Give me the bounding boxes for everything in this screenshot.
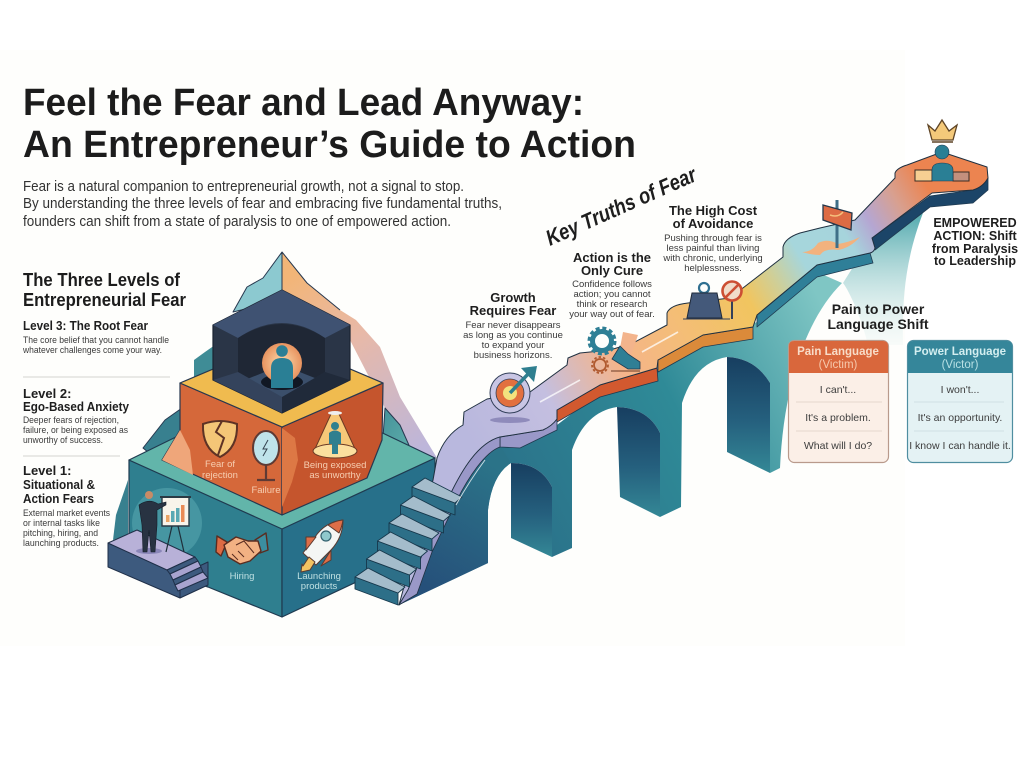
level 2 icon labels: Failure [251, 485, 281, 496]
truth: growth requires fear: Growth [490, 290, 536, 305]
icon: leader on podium with crown [915, 120, 969, 181]
level 2 text: unworthy of success. [23, 435, 103, 446]
truth: growth requires fear: Requires Fear [470, 303, 556, 318]
icon: person in spotlight [313, 411, 357, 458]
intro paragraph: By understanding the three levels of fear and embracing five fundamental truths, [23, 195, 502, 212]
level 1 text: Action Fears [23, 491, 94, 506]
pyramid level 3: dark root fear box [213, 290, 350, 413]
road side faces [500, 178, 988, 448]
icon: handshake [216, 533, 268, 564]
icon: no-entry sign [722, 282, 742, 319]
heading: pain to power [827, 301, 929, 332]
truth: high cost of avoidance [662, 203, 763, 274]
truth: action is the only cure: Only Cure [581, 263, 643, 278]
panel: power language: Power Language [914, 346, 1006, 358]
level 2 text: Ego-Based Anxiety [23, 399, 130, 414]
panel: power language: (Victor) [942, 359, 979, 371]
level 2 text: Deeper fears of rejection, [23, 415, 119, 426]
panel: power language: I know I can handle it. [909, 440, 1011, 452]
icon: cracked mirror [253, 431, 279, 480]
level 1 text: Situational & [23, 477, 95, 492]
empowered action label: to Leadership [934, 254, 1016, 268]
level 1 text: or internal tasks like [23, 518, 100, 529]
level 1 text: pitching, hiring, and [23, 528, 98, 539]
truth: high cost of avoidance: The High Cost [669, 203, 758, 218]
title: An Entrepreneur’s Guide to Action [23, 124, 636, 166]
icon: target with arrow [490, 366, 537, 423]
truth: growth requires fear: business horizons. [474, 350, 552, 361]
level 2 text: Level 2: [23, 386, 71, 401]
truth: growth requires fear: to expand your [482, 340, 544, 351]
side strip of curved ramp [399, 437, 500, 605]
level 1 text [23, 463, 110, 549]
level 1 icon labels: Launching [297, 571, 341, 582]
level 2 text: failure, or being exposed as [23, 425, 128, 436]
level 3 text [22, 318, 169, 356]
road surface: ascending path [399, 152, 988, 605]
intro paragraph [23, 178, 502, 230]
level 1 text: External market events [23, 508, 110, 519]
level 1 text: Level 1: [23, 463, 71, 478]
icon: signpost with path [802, 200, 860, 255]
presenter stage with stairs [108, 530, 208, 598]
panel: pain language: What will I do? [804, 440, 872, 452]
level 2 icon labels: as unworthy [309, 470, 361, 481]
heading: pain to power: Pain to Power [832, 301, 925, 317]
icon: cracked shield [203, 421, 237, 457]
truth: action is the only cure: Action is the [573, 250, 651, 265]
truth: action is the only cure: Confidence follows [572, 279, 652, 290]
intro paragraph: founders can shift from a state of paralysis to one of empowered action. [23, 213, 451, 230]
empowered action label [932, 216, 1018, 268]
truth: high cost of avoidance: Pushing through fear is [664, 233, 762, 244]
empowered action label: EMPOWERED [933, 216, 1017, 230]
icon: heavy weight [683, 283, 730, 319]
truth: growth requires fear: as long as you continue [463, 330, 563, 341]
icon: rocket [301, 520, 343, 572]
level 1 icon labels: products [301, 581, 337, 592]
panel: pain language [788, 340, 888, 462]
staircase to bridge [355, 478, 462, 605]
panel: power language [908, 340, 1012, 462]
heading: three levels: The Three Levels of [23, 270, 181, 290]
panel: power language: I won't... [941, 384, 979, 396]
pyramid level 2: orange block [162, 340, 383, 515]
level 3 text: whatever challenges come your way. [22, 345, 162, 356]
level 2 icon labels: rejection [202, 470, 238, 481]
bridge arches [399, 272, 842, 605]
level 1 icon labels: Hiring [230, 571, 254, 582]
truth: high cost of avoidance: less painful than living [667, 243, 759, 254]
empowered action label: ACTION: Shift [933, 229, 1017, 243]
level 3 text: Level 3: The Root Fear [23, 318, 148, 333]
fading arch behind upper bridge [843, 213, 923, 345]
halo behind presenter [132, 488, 202, 558]
road direction arrows [456, 332, 678, 505]
icon: presenter and chart board [136, 491, 191, 554]
level 3 text: The core belief that you cannot handle [23, 335, 169, 346]
heading: three levels [23, 270, 186, 310]
empowered action label: from Paralysis [932, 242, 1018, 256]
truth: high cost of avoidance: with chronic, underlying [662, 253, 763, 264]
pyramid level 1: teal base block [129, 385, 435, 617]
intro paragraph: Fear is a natural companion to entrepreneurial growth, not a signal to stop. [23, 178, 464, 195]
truth: growth requires fear [463, 290, 563, 361]
heading: three levels: Entrepreneurial Fear [23, 290, 186, 310]
truth: action is the only cure: action; you cannot [573, 289, 651, 300]
truth: action is the only cure [569, 250, 655, 320]
truth: high cost of avoidance: of Avoidance [673, 216, 753, 231]
title [23, 82, 636, 166]
truth: action is the only cure: think or research [577, 299, 647, 310]
level 2 icon labels: Being exposed [304, 460, 366, 471]
truth: high cost of avoidance: helplessness. [684, 263, 742, 274]
panel: pain language: (Victim) [819, 359, 858, 371]
truth: growth requires fear: Fear never disappears [465, 320, 561, 331]
level 2 icon labels: Fear of [205, 459, 235, 470]
icon: gears and stepping shoe [589, 328, 640, 373]
panel: pain language: I can't... [820, 384, 856, 396]
level 2 text [23, 386, 130, 446]
title: Feel the Fear and Lead Anyway: [23, 82, 584, 124]
mountain behind pyramid [113, 252, 437, 540]
heading: key truths of fear: Key Truths of Fear [542, 161, 701, 251]
level 1 text: launching products. [23, 538, 99, 549]
panel: pain language: Pain Language [797, 346, 879, 358]
panel: power language: It's an opportunity. [918, 412, 1002, 424]
panel: pain language: It's a problem. [805, 412, 871, 424]
level 1 icon labels [230, 571, 341, 592]
heading: pain to power: Language Shift [827, 316, 929, 332]
level 2 icon labels [202, 459, 366, 496]
icon: person in box [271, 345, 293, 388]
truth: action is the only cure: your way out of fear. [569, 309, 655, 320]
